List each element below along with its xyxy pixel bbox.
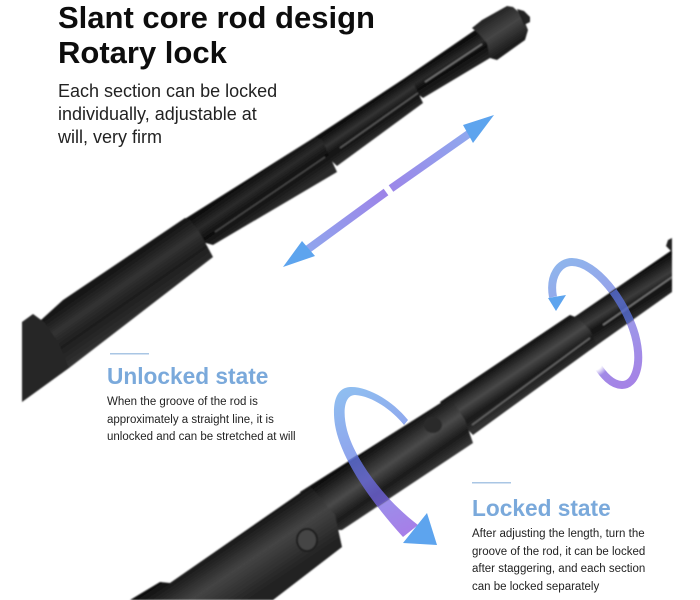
intro text: individually, adjustable at xyxy=(58,104,257,124)
callout: locked state: can be locked separately xyxy=(472,581,599,593)
heading xyxy=(58,0,375,70)
callout: locked state xyxy=(472,482,645,593)
icon: large ring arrowhead xyxy=(403,513,437,545)
rod: locked lower rod xyxy=(130,238,672,600)
callout: unlocked state xyxy=(107,353,296,443)
callout: unlocked state: Unlocked state xyxy=(107,363,268,389)
callout: locked state: groove of the rod, it can be locked xyxy=(472,546,645,558)
intro text: will, very firm xyxy=(57,127,162,147)
rod: extended upper rod xyxy=(22,6,530,402)
callout: unlocked state: When the groove of the rod is xyxy=(107,396,258,408)
callout: locked state: After adjusting the length, turn the xyxy=(472,528,645,540)
rotation ring behind lower rod xyxy=(334,262,638,537)
callout: unlocked state: approximately a straight line, it is xyxy=(107,414,274,426)
intro text xyxy=(57,81,277,147)
heading: Slant core rod design xyxy=(58,0,375,35)
icon: small ring arrowhead xyxy=(548,295,566,311)
double-headed extension arrow xyxy=(283,115,494,267)
callout: locked state: after staggering, and each section xyxy=(472,563,645,575)
callout: locked state: Locked state xyxy=(472,495,611,521)
intro text: Each section can be locked xyxy=(58,81,277,101)
heading: Rotary lock xyxy=(58,35,228,70)
rotation ring overlay across rod xyxy=(348,289,634,506)
callout: unlocked state: unlocked and can be stretched at will xyxy=(107,431,296,443)
